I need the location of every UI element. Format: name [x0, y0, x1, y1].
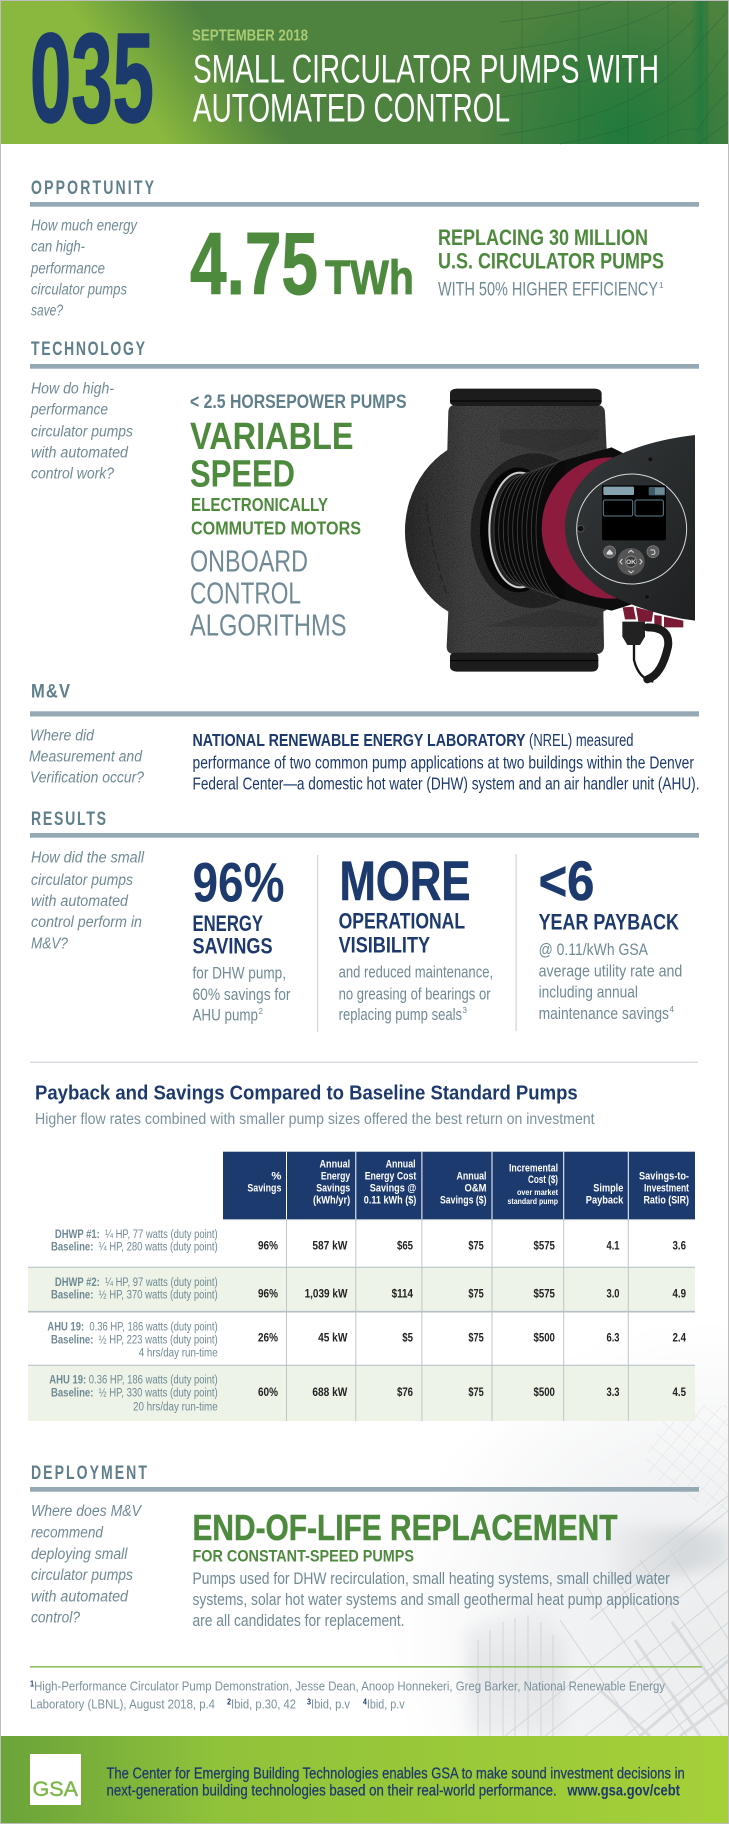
- table header: Incremental: [509, 1163, 558, 1175]
- question: deployment: Where does M&V: [31, 1503, 143, 1520]
- stat description: U.S. CIRCULATOR PUMPS: [438, 249, 664, 274]
- question: M&V: [29, 728, 144, 787]
- section: opportunity: [30, 177, 699, 320]
- table header: (kWh/yr): [313, 1195, 350, 1207]
- technology text stack: ELECTRONICALLY: [191, 494, 329, 515]
- table header: Payback: [586, 1195, 624, 1207]
- header banner: [0, 1, 729, 149]
- table subheading: Higher flow rates combined with smaller pump sizes offered the best return on investment: [35, 1111, 595, 1128]
- table header: Energy Cost: [365, 1171, 416, 1183]
- result: 96% energy savings: [192, 851, 291, 1025]
- row 3: AHU 19 four hours: [47, 1322, 686, 1360]
- section: results: [30, 808, 699, 1032]
- footnotes: Laboratory (LBNL), August 2018, p.4: [30, 1698, 215, 1712]
- deployment subheadline: FOR CONSTANT-SPEED PUMPS: [192, 1547, 414, 1566]
- row 3: AHU 19 four hours: AHU 19: 0.36 HP, 186 watts (duty point): [47, 1322, 218, 1334]
- image: circulator pump: OK: [626, 559, 636, 566]
- image: circulator pump: [405, 389, 695, 682]
- table header: Energy: [321, 1171, 351, 1183]
- title: [193, 47, 659, 131]
- question: technology: control work?: [31, 465, 114, 482]
- question: deployment: deploying small: [31, 1546, 128, 1563]
- row 4: AHU 19 twenty hours: AHU 19: 0.36 HP, 186 watts (duty point): [49, 1374, 218, 1386]
- table header: Savings @: [370, 1183, 416, 1195]
- row backgrounds: [28, 1267, 695, 1421]
- question: results: with automated: [31, 893, 129, 910]
- table header: Investment: [644, 1183, 689, 1195]
- question: deployment: recommend: [31, 1525, 104, 1542]
- question: M&V: Where did: [30, 728, 95, 745]
- M&V description: [192, 730, 700, 793]
- technology text stack: ALGORITHMS: [190, 607, 346, 642]
- question: deployment: with automated: [31, 1589, 129, 1606]
- stat description: WITH 50% HIGHER EFFICIENCY: [438, 280, 658, 301]
- title: AUTOMATED CONTROL: [193, 87, 510, 131]
- result: under 6 year payback: <6: [539, 850, 594, 912]
- row 3: AHU 19 four hours: 4 hrs/day run-time: [139, 1348, 218, 1360]
- result: 96% energy savings: 60% savings for: [192, 985, 291, 1004]
- footer band: [0, 1736, 729, 1823]
- footnotes: Ibid, p.v: [311, 1698, 351, 1712]
- question: deployment: circulator pumps: [31, 1567, 133, 1584]
- question: technology: circulator pumps: [31, 424, 133, 441]
- footnotes: 3: [307, 1698, 311, 1707]
- question: technology: with automated: [31, 444, 129, 461]
- table header: over market: [517, 1187, 558, 1197]
- table header: Savings: [247, 1183, 281, 1195]
- background: faint building linework: [380, 1320, 729, 1736]
- result: 96% energy savings: SAVINGS: [192, 934, 272, 959]
- table header: 0.11 kWh ($): [364, 1195, 416, 1207]
- heading: M&V: M&V: [31, 680, 70, 702]
- question: M&V: Verification occur?: [30, 770, 144, 787]
- table header: Savings ($): [440, 1195, 487, 1207]
- row 1: DHWP #1: $65: [397, 1240, 414, 1252]
- row 2: DHWP #2: [51, 1277, 686, 1302]
- technology text stack: CONTROL: [190, 575, 301, 610]
- table header: Annual: [456, 1171, 486, 1183]
- result: 96% energy savings: 96%: [192, 851, 284, 914]
- result: under 6 year payback: @ 0.11/kWh GSA: [539, 940, 649, 959]
- row 1: DHWP #1: 96%: [258, 1240, 278, 1252]
- table heading: Payback and Savings Compared to Baseline Standard Pumps: [35, 1082, 578, 1104]
- table header: %: [271, 1170, 281, 1182]
- footnotes: 1: [30, 1680, 35, 1689]
- table: payback and savings: [28, 1152, 695, 1421]
- logo: GSA: GSA: [32, 1778, 78, 1801]
- result: more operational visibility: no greasing of bearings or: [339, 984, 491, 1003]
- row 1: DHWP #1: DHWP #1: ¼ HP, 77 watts (duty point): [55, 1229, 218, 1241]
- question: results: circulator pumps: [31, 872, 133, 889]
- row 3: AHU 19 four hours: $5: [402, 1333, 414, 1345]
- deployment headline: END-OF-LIFE REPLACEMENT: [192, 1507, 618, 1548]
- technology text stack: SPEED: [190, 454, 295, 496]
- heading: opportunity: OPPORTUNITY: [31, 177, 155, 199]
- row 4: AHU 19 twenty hours: 4.5: [672, 1387, 686, 1399]
- result: under 6 year payback: including annual: [539, 982, 638, 1001]
- result: 96% energy savings: AHU pump: [192, 1006, 258, 1025]
- section: technology: [30, 338, 699, 682]
- row 4: AHU 19 twenty hours: 60%: [258, 1387, 278, 1399]
- row 2: DHWP #2: 3.0: [606, 1289, 620, 1301]
- result: 96% energy savings: 2: [258, 1007, 264, 1016]
- row 2: DHWP #2: 4.9: [672, 1289, 686, 1301]
- table header: Savings-to-: [639, 1171, 689, 1183]
- result: under 6 year payback: 4: [670, 1005, 674, 1014]
- row 4: AHU 19 twenty hours: $500: [534, 1387, 555, 1399]
- result: under 6 year payback: YEAR PAYBACK: [539, 909, 679, 934]
- footnotes: High-Performance Circulator Pump Demonstration, Jesse Dean, Anoop Honnekeri, Greg Barker, National Renewable Energy: [34, 1680, 666, 1694]
- table header: O&M: [464, 1183, 486, 1195]
- question: opportunity: performance: [30, 260, 105, 277]
- row 3: AHU 19 four hours: $75: [468, 1333, 484, 1345]
- date: SEPTEMBER 2018: [192, 28, 308, 45]
- row 3: AHU 19 four hours: Baseline: ½ HP, 223 watts (duty point): [51, 1334, 218, 1346]
- row 2: DHWP #2: 1,039 kW: [305, 1289, 348, 1301]
- stat description: REPLACING 30 MILLION: [438, 225, 648, 250]
- footer statement: [106, 1765, 685, 1800]
- M&V description: (NREL) measured: [529, 730, 634, 750]
- table header: Ratio (SIR): [644, 1195, 689, 1207]
- result: under 6 year payback: average utility rate and: [539, 962, 682, 981]
- question: opportunity: can high-: [31, 239, 85, 256]
- result: under 6 year payback: maintenance savings: [539, 1004, 669, 1023]
- row 4: AHU 19 twenty hours: 3.3: [606, 1387, 620, 1399]
- big stat: 4.75 TWh: 4.75: [190, 214, 318, 313]
- question: opportunity: save?: [31, 303, 63, 320]
- question: deployment: control?: [31, 1610, 80, 1627]
- row 4: AHU 19 twenty hours: $76: [397, 1387, 413, 1399]
- question: opportunity: circulator pumps: [31, 281, 127, 298]
- question: technology: [30, 380, 133, 482]
- section: measurement and verification: [29, 680, 700, 793]
- result: more operational visibility: replacing pump seals: [339, 1005, 462, 1024]
- row 4: AHU 19 twenty hours: Baseline: ½ HP, 330 watts (duty point): [51, 1388, 218, 1400]
- result: more operational visibility: [339, 850, 493, 1024]
- result: more operational visibility: and reduced maintenance,: [339, 962, 493, 981]
- technology text stack: COMMUTED MOTORS: [191, 518, 361, 539]
- big stat: 4.75 TWh: TWh: [325, 252, 414, 305]
- footnotes: Ibid, p.30, 42: [231, 1698, 296, 1712]
- result: more operational visibility: VISIBILITY: [339, 933, 430, 958]
- row 1: DHWP #1: 587 kW: [312, 1240, 348, 1252]
- row 2: DHWP #2: $114: [392, 1289, 414, 1301]
- technology text stack: < 2.5 HORSEPOWER PUMPS: [190, 392, 406, 413]
- question: results: control perform in: [31, 914, 142, 931]
- heading: deployment: DEPLOYMENT: [31, 1462, 147, 1484]
- result: more operational visibility: OPERATIONAL: [339, 908, 465, 933]
- row 2: DHWP #2: $575: [534, 1289, 555, 1301]
- report number: 035: [30, 7, 154, 149]
- heading: results: RESULTS: [31, 808, 106, 830]
- deployment description: [192, 1569, 680, 1630]
- M&V description: NATIONAL RENEWABLE ENERGY LABORATORY: [192, 730, 526, 750]
- row 4: AHU 19 twenty hours: [49, 1374, 686, 1414]
- section: deployment: [30, 1462, 699, 1630]
- row 3: AHU 19 four hours: 6.3: [606, 1333, 620, 1345]
- footer statement: next-generation building technologies based on their real-world performance.: [106, 1783, 557, 1800]
- row 4: AHU 19 twenty hours: $75: [468, 1387, 484, 1399]
- row 1: DHWP #1: $575: [534, 1240, 555, 1252]
- stat description: 1: [659, 281, 664, 290]
- row 4: AHU 19 twenty hours: 20 hrs/day run-time: [133, 1402, 218, 1414]
- question: results: M&V?: [31, 935, 68, 952]
- question: results: How did the small: [31, 850, 145, 867]
- result: under 6 year payback: [539, 850, 682, 1023]
- question: deployment: [31, 1503, 143, 1627]
- stat description: [438, 225, 664, 301]
- row 3: AHU 19 four hours: 45 kW: [318, 1333, 348, 1345]
- table header: Annual: [386, 1159, 416, 1171]
- table header: [223, 1152, 695, 1219]
- technology text stack: ONBOARD: [190, 544, 308, 579]
- question: results: [31, 850, 145, 952]
- footnotes: 4: [363, 1698, 367, 1707]
- logo: GSA: [30, 1754, 81, 1805]
- result: more operational visibility: MORE: [340, 850, 470, 912]
- row 1: DHWP #1: 4.1: [606, 1240, 620, 1252]
- footnotes: [30, 1680, 666, 1712]
- result: 96% energy savings: ENERGY: [192, 911, 263, 936]
- table header: Annual: [320, 1159, 350, 1171]
- technology text stack: VARIABLE: [190, 416, 354, 458]
- question: technology: How do high-: [31, 380, 114, 397]
- deployment description: are all candidates for replacement.: [192, 1611, 404, 1630]
- question: M&V: Measurement and: [29, 749, 143, 766]
- row 3: AHU 19 four hours: 2.4: [672, 1333, 686, 1345]
- table header: Cost ($): [528, 1174, 558, 1186]
- question: technology: performance: [30, 401, 108, 418]
- table header: standard pump: [508, 1196, 558, 1206]
- question: opportunity: How much energy: [31, 218, 138, 235]
- row 1: DHWP #1: [51, 1229, 686, 1254]
- row 4: AHU 19 twenty hours: 688 kW: [312, 1387, 348, 1399]
- table header: Savings: [316, 1183, 350, 1195]
- question: opportunity: [30, 218, 138, 320]
- row 2: DHWP #2: DHWP #2: ¼ HP, 97 watts (duty point): [55, 1277, 218, 1289]
- row 2: DHWP #2: 96%: [258, 1289, 278, 1301]
- result: more operational visibility: 3: [462, 1006, 468, 1015]
- result: 96% energy savings: for DHW pump,: [192, 964, 286, 983]
- row 1: DHWP #1: Baseline: ¼ HP, 280 watts (duty point): [51, 1242, 218, 1254]
- row 2: DHWP #2: Baseline: ½ HP, 370 watts (duty point): [51, 1290, 218, 1302]
- footnotes: Ibid, p.v: [367, 1698, 405, 1712]
- heading: technology: TECHNOLOGY: [31, 338, 146, 360]
- row 1: DHWP #1: $75: [468, 1240, 484, 1252]
- footer statement: www.gsa.gov/cebt: [567, 1783, 680, 1800]
- technology text stack: [190, 392, 406, 642]
- row 1: DHWP #1: 3.6: [672, 1240, 686, 1252]
- row 3: AHU 19 four hours: 26%: [258, 1333, 278, 1345]
- footnotes: 2: [227, 1698, 231, 1707]
- row 3: AHU 19 four hours: $500: [534, 1333, 555, 1345]
- row 2: DHWP #2: $75: [468, 1289, 484, 1301]
- table header: Simple: [593, 1183, 623, 1195]
